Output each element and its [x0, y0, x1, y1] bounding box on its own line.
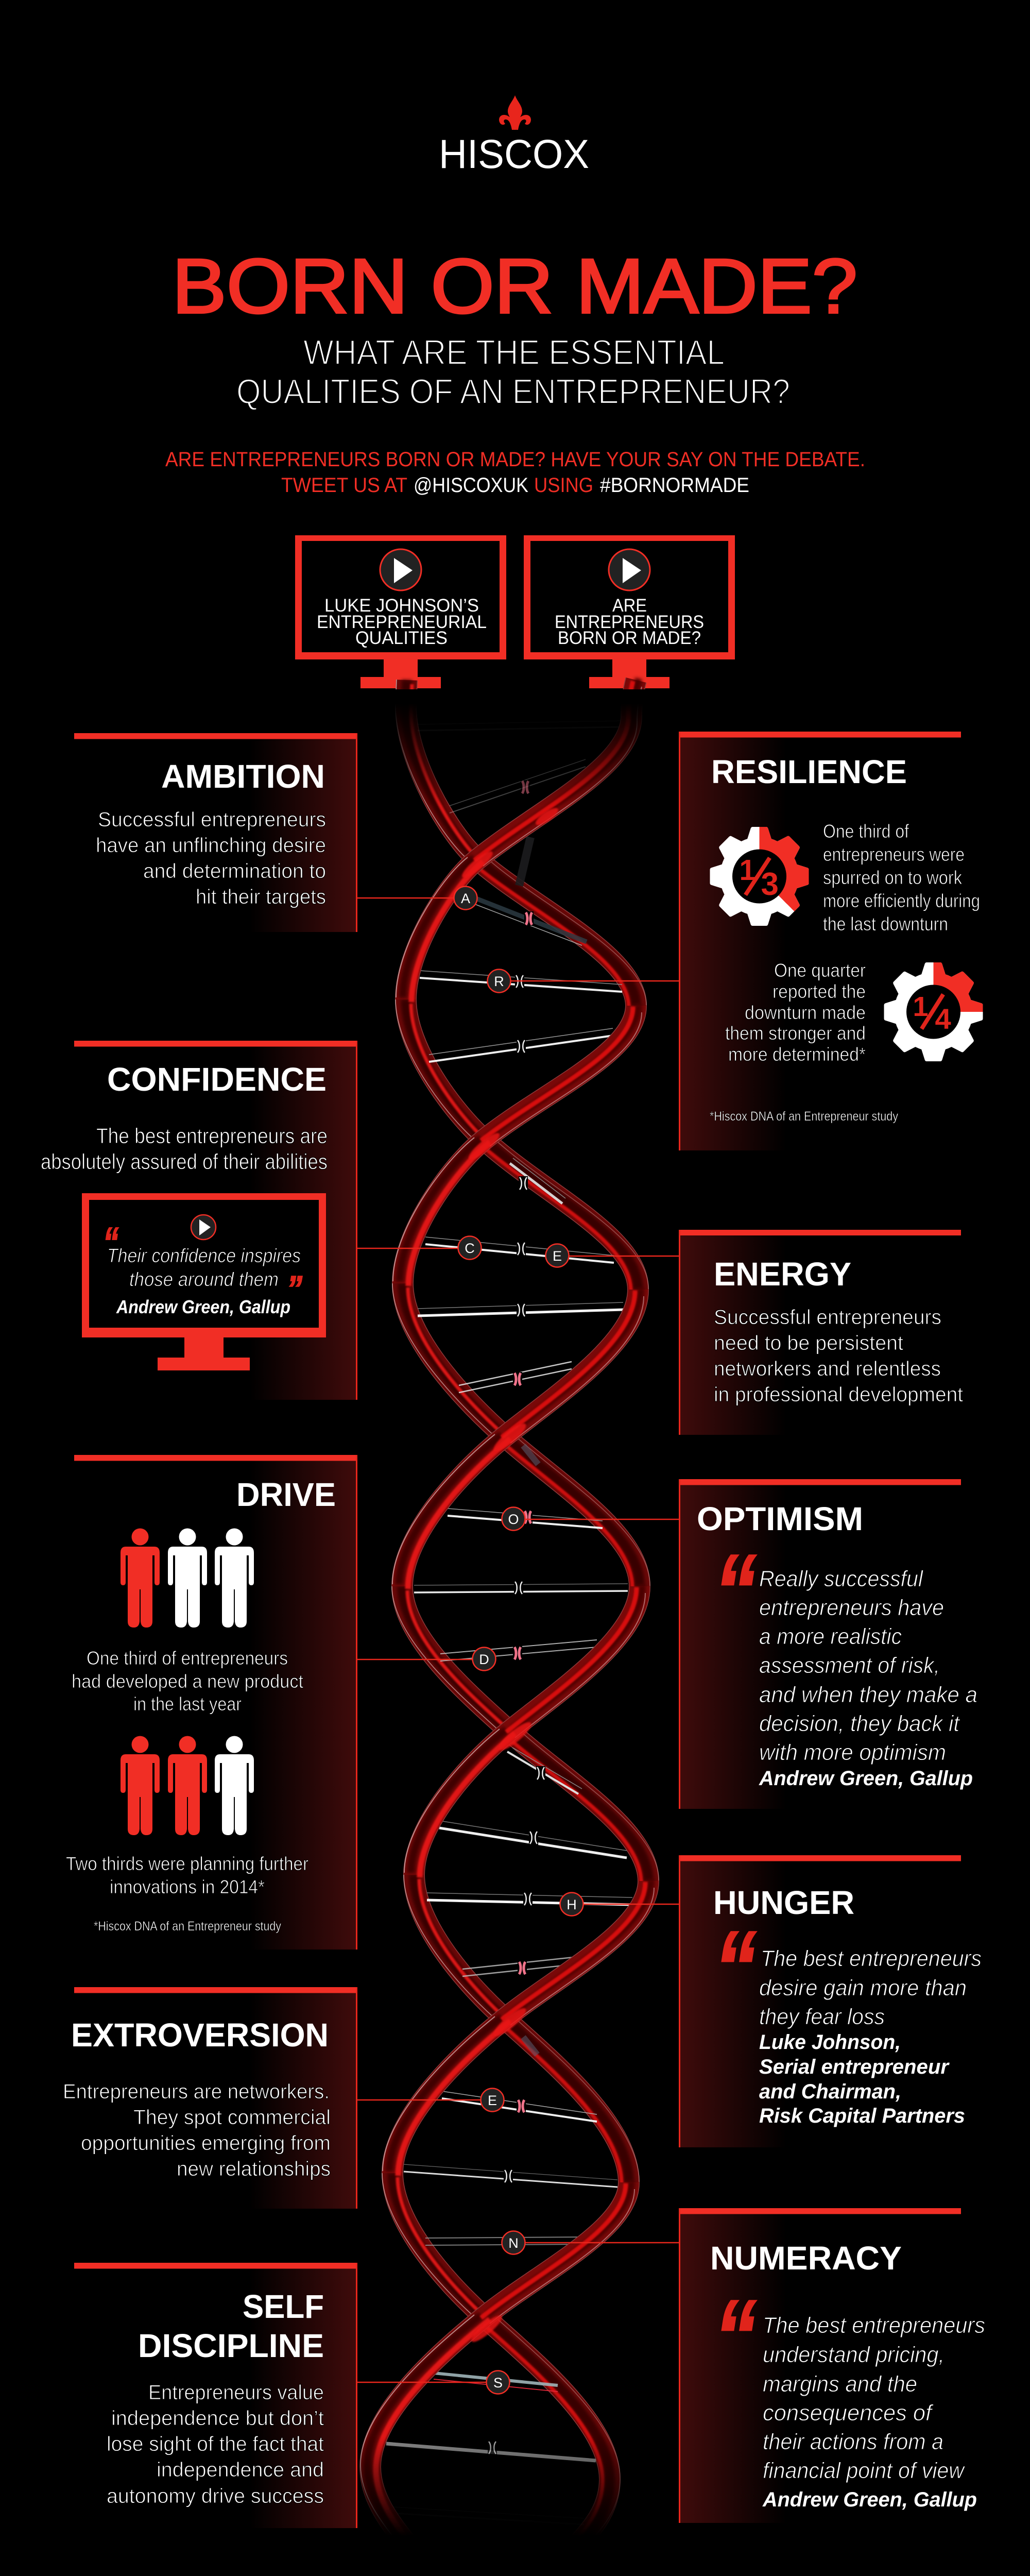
badge: D — [473, 1648, 495, 1670]
quote text: decision, they back it — [759, 1711, 960, 1736]
logo: Hiscox top — [439, 95, 589, 177]
icon: gear one quarter: 1 — [913, 991, 929, 1022]
quote mark: “ — [714, 1909, 757, 2027]
heading: ENERGY — [714, 1256, 851, 1293]
monitor caption: QUALITIES — [355, 628, 448, 648]
badge: E extroversion: E — [488, 2093, 497, 2108]
title: BORN OR MADE? — [172, 243, 857, 329]
heading: AMBITION — [161, 758, 325, 795]
stat text: one third: the last downturn — [823, 913, 948, 935]
body text: Successful entrepreneurs — [98, 808, 326, 831]
heading: OPTIMISM — [697, 1500, 863, 1537]
top fade — [357, 689, 678, 805]
stat text: new product: had developed a new product — [72, 1671, 304, 1692]
stat text: innovations — [66, 1853, 308, 1897]
icon: fleur-de-lis — [499, 95, 531, 130]
body text: lose sight of the fact that — [107, 2433, 324, 2455]
badge: O — [502, 1507, 525, 1530]
attribution — [759, 2031, 965, 2127]
badge: S — [486, 2371, 510, 2394]
quote text: margins and the — [763, 2371, 917, 2397]
body text: in professional development — [714, 1383, 963, 1406]
footnote: *Hiscox DNA of an Entrepreneur study — [94, 1919, 281, 1934]
body text: have an unflinching desire — [96, 834, 326, 857]
badge: A — [454, 886, 477, 910]
stat text: one quarter — [725, 960, 866, 1065]
monitor caption: ARE — [612, 596, 647, 616]
quote text: consequences of — [763, 2400, 934, 2426]
body text: networkers and relentless — [714, 1358, 941, 1380]
body text: need to be persistent — [714, 1332, 903, 1354]
quote text: Their confidence inspires — [107, 1245, 301, 1267]
badge: D: D — [479, 1652, 489, 1667]
heading: DRIVE — [236, 1476, 336, 1513]
panel: confidence — [41, 1041, 357, 1400]
body text: Successful entrepreneurs — [714, 1306, 941, 1329]
subtitle: QUALITIES OF AN ENTREPRENEUR? — [236, 372, 790, 411]
video monitor: Luke Johnson — [295, 535, 506, 688]
icon: gear one quarter: 4 — [935, 1003, 951, 1035]
call to action text: ARE ENTREPRENEURS BORN OR MADE? HAVE YOUR SAY ON THE DEBATE. — [165, 448, 865, 471]
quote text — [763, 2313, 985, 2483]
stat text: new product: in the last year — [133, 1693, 242, 1715]
call to action text: @HISCOXUK — [414, 474, 528, 497]
back strands — [382, 680, 659, 2552]
quote text: desire gain more than — [759, 1975, 967, 2001]
body text: absolutely assured of their abilities — [41, 1149, 328, 1174]
badge: H: H — [566, 1897, 577, 1912]
quote text: with more optimism — [759, 1740, 946, 1765]
call to action text: TWEET US AT — [281, 474, 407, 497]
monitor caption — [317, 596, 487, 648]
stat text: one quarter: them stronger and — [725, 1023, 866, 1044]
badge: E extroversion — [481, 2089, 504, 2111]
stat text: one quarter: downturn made — [745, 1002, 866, 1023]
panel: ambition — [74, 733, 357, 932]
base pair rungs — [386, 721, 632, 2524]
attribution: Andrew Green, Gallup — [116, 1296, 290, 1317]
stat text: one third: more efficiently during — [823, 890, 980, 911]
closing quote mark: ” — [287, 1268, 302, 1309]
stat text: one third — [823, 821, 980, 935]
quote text: The best entrepreneurs — [763, 2313, 985, 2338]
body text: opportunities emerging from — [81, 2132, 331, 2155]
quote text: a more realistic — [759, 1624, 902, 1649]
quote text — [759, 1566, 977, 1765]
quote mark: “ — [714, 2278, 757, 2396]
body text: independence but don’t — [111, 2407, 324, 2430]
footnote: *Hiscox DNA of an Entrepreneur study — [710, 1109, 898, 1124]
quote text — [759, 1946, 982, 2029]
stat text: new product: One third of entrepreneurs — [87, 1648, 288, 1669]
body text — [63, 2080, 331, 2180]
badge: S: S — [493, 2375, 503, 2391]
front strands — [360, 679, 654, 2553]
heading: SELF — [243, 2288, 324, 2325]
quote text: they fear loss — [759, 2004, 885, 2029]
subtitle — [236, 333, 790, 411]
body text — [41, 1124, 328, 1174]
call to action text: USING — [534, 474, 593, 497]
badge: N: N — [508, 2235, 519, 2251]
badge: E energy — [546, 1244, 569, 1267]
monitor caption: ENTREPRENEURIAL — [317, 612, 487, 632]
body text: Entrepreneurs value — [148, 2381, 324, 2404]
badge: H — [560, 1893, 583, 1916]
heading: NUMERACY — [710, 2240, 902, 2277]
icon: gear one quarter — [886, 964, 981, 1059]
heading: CONFIDENCE — [107, 1061, 327, 1098]
icon: play button — [191, 1215, 216, 1240]
badge: E energy: E — [553, 1248, 562, 1264]
video monitor: Are entrepreneurs born or made — [524, 535, 735, 688]
icon: people one third — [121, 1528, 254, 1628]
quote text: entrepreneurs have — [759, 1595, 944, 1620]
panel: resilience — [679, 732, 981, 1150]
body text — [107, 2381, 324, 2507]
stat text: innovations: innovations in 2014* — [110, 1876, 265, 1897]
stat text: innovations: Two thirds were planning further — [66, 1853, 308, 1874]
heading: HUNGER — [713, 1884, 854, 1921]
stat text: one third: spurred on to work — [823, 867, 962, 888]
quote text: understand pricing, — [763, 2342, 945, 2367]
crossing highlights — [459, 805, 560, 2345]
body text — [96, 808, 326, 908]
attribution: Andrew Green, Gallup — [759, 1767, 973, 1790]
quote text: their actions from a — [763, 2429, 943, 2454]
attribution: Andrew Green, Gallup — [762, 2488, 977, 2511]
quote text: The best entrepreneurs — [761, 1946, 982, 1971]
quote mark: “ — [714, 1532, 757, 1651]
bottom fade — [357, 2437, 678, 2561]
badge: R: R — [494, 974, 504, 989]
body text: and determination to — [143, 860, 326, 883]
icon: gear one third: 3 — [761, 867, 779, 902]
opening quote mark: “ — [103, 1219, 118, 1266]
badge: C: C — [465, 1241, 475, 1256]
stat text: one quarter: One quarter — [774, 960, 866, 981]
attribution: Risk Capital Partners — [759, 2105, 965, 2127]
heading: EXTROVERSION — [71, 2016, 329, 2054]
DNA double helix — [357, 679, 678, 2561]
heading: DISCIPLINE — [138, 2327, 324, 2364]
body text: independence and — [157, 2459, 324, 2481]
monitor caption: ENTREPRENEURS — [555, 612, 704, 632]
stat text: new product — [72, 1648, 304, 1715]
attribution: and Chairman, — [759, 2080, 901, 2103]
heading: RESILIENCE — [711, 753, 907, 790]
body text: autonomy drive success — [107, 2485, 324, 2507]
quote monitor — [82, 1193, 326, 1370]
quote text: Really successful — [759, 1566, 923, 1591]
badge: O: O — [508, 1512, 519, 1527]
stat text: one third: entrepreneurs were — [823, 844, 965, 865]
badge: N — [502, 2231, 525, 2255]
badge: C — [458, 1236, 481, 1259]
panel: numeracy — [679, 2208, 985, 2523]
monitor caption: BORN OR MADE? — [558, 628, 701, 648]
panel: energy — [679, 1230, 963, 1435]
icon: play button — [380, 549, 421, 590]
attribution: Serial entrepreneur — [759, 2056, 950, 2078]
body text: new relationships — [177, 2158, 331, 2180]
body text — [714, 1306, 963, 1406]
panel: optimism — [679, 1479, 977, 1809]
logo wordmark: HISCOX — [439, 131, 589, 177]
heading — [138, 2288, 324, 2364]
stat text: one quarter: reported the — [772, 981, 866, 1002]
attribution: Luke Johnson, — [759, 2031, 901, 2054]
quote text: and when they make a — [759, 1682, 977, 1707]
quote text: financial point of view — [763, 2458, 966, 2483]
body text: The best entrepreneurs are — [96, 1124, 328, 1148]
stat text: one third: One third of — [823, 821, 909, 842]
panel: self discipline — [74, 2263, 357, 2528]
icon: play button — [609, 549, 650, 590]
icon: gear one third: 1 — [740, 854, 756, 887]
badge: R — [487, 970, 511, 992]
stat text: one quarter: more determined* — [728, 1044, 866, 1065]
quote text — [107, 1245, 301, 1291]
panel: drive — [66, 1455, 357, 1950]
icon: gear one third — [712, 829, 806, 924]
icon: people two thirds — [121, 1736, 254, 1835]
body text: hit their targets — [196, 886, 326, 908]
monitor caption: LUKE JOHNSON’S — [324, 596, 479, 616]
panel: hunger — [679, 1855, 982, 2147]
call to action text: #BORNORMADE — [600, 474, 749, 497]
quote text: assessment of risk, — [759, 1653, 940, 1678]
body text: Entrepreneurs are networkers. — [63, 2080, 330, 2103]
quote text: those around them — [129, 1269, 279, 1291]
leader lines — [357, 898, 679, 2382]
body text: They spot commercial — [133, 2106, 331, 2129]
badge: A: A — [461, 891, 470, 906]
panel: extroversion — [63, 1987, 357, 2209]
call to action text — [165, 448, 865, 497]
monitor caption — [555, 596, 704, 648]
subtitle: WHAT ARE THE ESSENTIAL — [303, 333, 725, 372]
